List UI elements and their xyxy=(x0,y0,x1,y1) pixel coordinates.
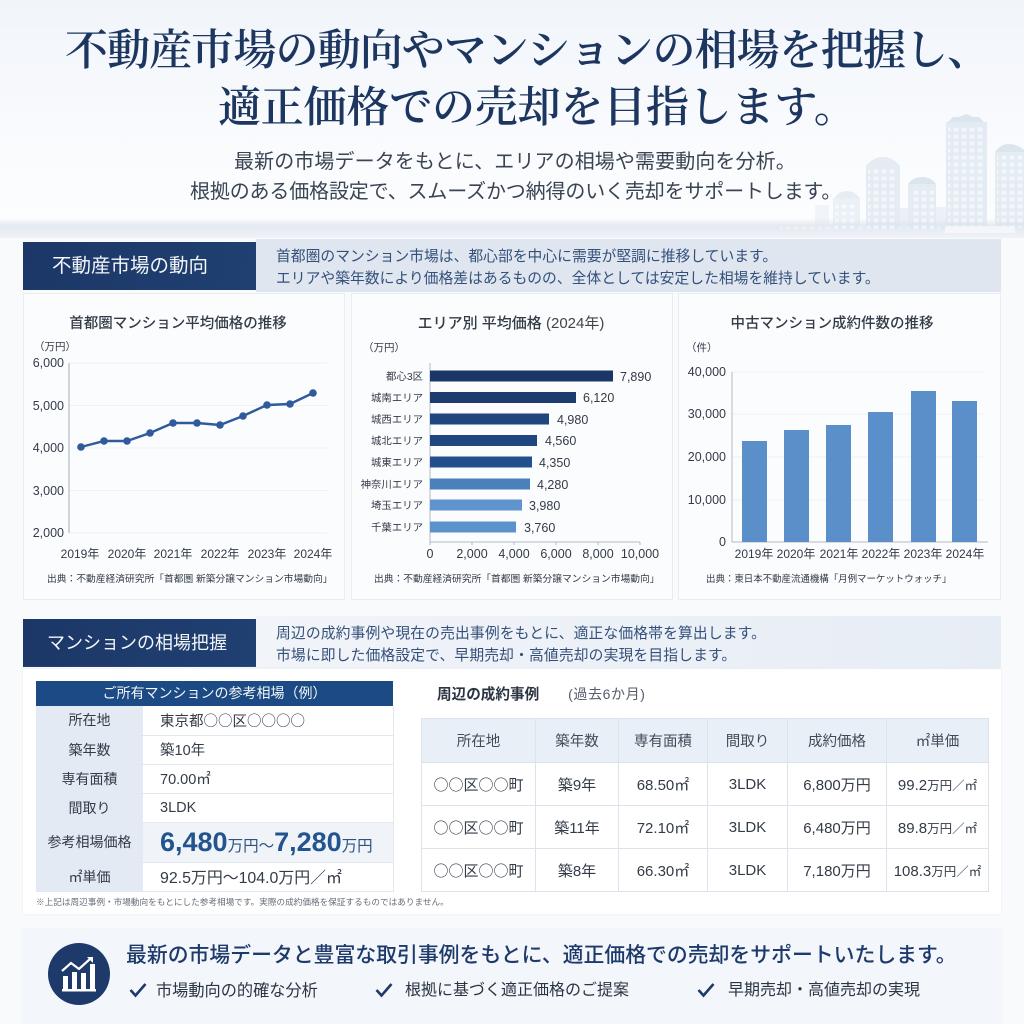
table: own property: 70.00㎡ xyxy=(160,772,211,788)
section 2 heading xyxy=(23,619,256,667)
x axis labels: 2022年 xyxy=(201,547,239,561)
chart title: 中古マンション成約件数の推移 xyxy=(730,315,934,332)
table: own property: 92.5万円～104.0万円／㎡ xyxy=(160,870,342,887)
chart title: エリア別 平均価格 (2024年) xyxy=(418,315,604,332)
heading bar: own property table xyxy=(36,681,393,706)
value labels: 4,560 xyxy=(545,434,576,448)
table: nearby transactions: 7,180万円 xyxy=(803,862,871,880)
icon: check 2 xyxy=(376,983,392,998)
x axis labels: 8,000 xyxy=(582,547,614,561)
y axis labels: 5,000 xyxy=(33,399,64,413)
x axis labels: 2020年 xyxy=(108,547,146,561)
x axis labels: 2023年 xyxy=(248,547,286,561)
illustration: city skyline xyxy=(815,114,1024,233)
bars xyxy=(430,370,613,532)
table: nearby transactions: 築9年 xyxy=(558,776,596,794)
table: own property: 専有面積 xyxy=(62,770,118,786)
y axis labels: 6,000 xyxy=(33,356,64,370)
table: nearby transactions: 所在地 xyxy=(457,734,500,750)
value labels: 4,350 xyxy=(539,456,570,470)
y axis labels: 0 xyxy=(719,535,726,549)
table: own property: 参考相場価格 xyxy=(48,834,132,850)
table: nearby transactions: ○○区○○町 xyxy=(433,860,524,880)
section 1 description xyxy=(276,248,880,287)
table: nearby transactions: 108.3万円／㎡ xyxy=(894,862,981,880)
value labels: 3,760 xyxy=(524,521,555,535)
source: 出典：不動産経済研究所「首都圏 新築分譲マンション市場動向」 xyxy=(47,572,332,585)
title: 適正価格での売却を目指します。 xyxy=(218,85,857,132)
table: nearby transactions: 68.50㎡ xyxy=(637,776,689,794)
table: nearby transactions: 専有面積 xyxy=(634,734,692,750)
area labels: 城西エリア xyxy=(371,414,423,426)
x axis labels xyxy=(735,547,984,561)
table: own property xyxy=(36,706,394,892)
icon: check 3 xyxy=(698,983,714,998)
icon: check 1 xyxy=(130,983,146,998)
x axis labels: 2022年 xyxy=(862,547,900,561)
title xyxy=(65,28,989,132)
panel: market price xyxy=(23,669,1001,914)
x axis labels: 2019年 xyxy=(735,547,773,561)
table: own property: 3LDK xyxy=(160,800,196,816)
x axis labels: 10,000 xyxy=(621,547,659,561)
y axis labels: 40,000 xyxy=(688,365,726,379)
x axis labels: 2020年 xyxy=(777,547,815,561)
unit label: （万円） xyxy=(363,342,405,354)
chart title: 首都圏マンション平均価格の推移 xyxy=(69,314,287,332)
benefit 2: 根拠に基づく適正価格のご提案 xyxy=(405,982,629,999)
area labels: 城南エリア xyxy=(371,392,423,404)
title: 不動産市場の動向やマンションの相場を把握し、 xyxy=(65,28,989,75)
table: nearby transactions: 間取り xyxy=(726,734,769,750)
table: nearby transactions xyxy=(421,718,989,892)
section 1 heading xyxy=(23,242,256,290)
y axis labels: 30,000 xyxy=(688,407,726,421)
table: nearby transactions: 築8年 xyxy=(558,862,596,880)
subtitle: 最新の市場データをもとに、エリアの相場や需要動向を分析。 xyxy=(234,151,796,173)
x axis labels: 2,000 xyxy=(456,547,488,561)
value labels: 7,890 xyxy=(620,370,651,384)
note: ※上記は周辺事例・市場動向をもとにした参考相場です。実際の成約価格を保証するものではありません。 xyxy=(36,897,449,907)
area labels: 千葉エリア xyxy=(371,521,423,534)
area labels: 城北エリア xyxy=(371,436,423,448)
table: own property: 築年数 xyxy=(68,742,110,758)
y axis labels: 3,000 xyxy=(33,484,64,498)
x axis labels: 6,000 xyxy=(540,547,572,561)
section 2 heading: マンションの相場把握 xyxy=(47,633,227,653)
section 2 description: 市場に即した価格設定で、早期売却・高値売却の実現を目指します。 xyxy=(276,648,736,664)
table: own property: 間取り xyxy=(68,800,110,816)
unit label: （件） xyxy=(686,342,718,354)
y axis labels xyxy=(33,356,64,540)
section 1 heading: 不動産市場の動向 xyxy=(52,255,208,277)
y axis labels: 20,000 xyxy=(688,450,726,464)
panel: area price bar chart xyxy=(351,293,673,600)
table: nearby transactions: 99.2万円／㎡ xyxy=(898,776,977,794)
table: nearby transactions: 築年数 xyxy=(555,734,599,750)
price line xyxy=(77,389,317,451)
benefit 1: 市場動向の的確な分析 xyxy=(156,982,318,1000)
x axis labels xyxy=(61,547,332,561)
table: own property: 築10年 xyxy=(160,743,205,759)
section 2 lead band xyxy=(256,616,1001,669)
section 1 lead band xyxy=(256,239,1001,292)
value labels: 4,980 xyxy=(557,413,588,427)
heading: nearby transactions: 周辺の成約事例 (過去6か月) xyxy=(437,686,645,703)
area labels xyxy=(361,371,423,534)
unit label: （万円） xyxy=(34,341,76,353)
panel: resale transactions bar chart xyxy=(678,293,1001,600)
benefit 3: 早期売却・高値売却の実現 xyxy=(728,982,920,999)
section 1 description: エリアや築年数により価格差はあるものの、全体としては安定した相場を維持しています。 xyxy=(276,271,880,287)
table: own property: ㎡単価 xyxy=(68,868,110,884)
x axis labels: 2023年 xyxy=(904,547,942,561)
area labels: 城東エリア xyxy=(371,456,423,469)
x axis labels: 2024年 xyxy=(946,547,984,561)
x axis labels: 4,000 xyxy=(498,547,530,561)
x axis labels: 2021年 xyxy=(820,547,858,561)
table: nearby transactions: 3LDK xyxy=(729,818,766,836)
x axis labels: 2024年 xyxy=(294,547,332,561)
subtitle xyxy=(190,150,841,203)
table: nearby transactions: ㎡単価 xyxy=(916,734,959,750)
table: nearby transactions: 72.10㎡ xyxy=(637,820,689,836)
value labels: 6,120 xyxy=(583,391,614,405)
icon: rising chart xyxy=(48,943,110,1005)
x axis labels: 0 xyxy=(427,547,434,561)
table: own property: 所在地 xyxy=(68,712,110,728)
section 1 description: 首都圏のマンション市場は、都心部を中心に需要が堅調に推移しています。 xyxy=(276,249,777,265)
table: nearby transactions: ○○区○○町 xyxy=(433,774,524,794)
y axis labels: 10,000 xyxy=(688,493,726,507)
bars xyxy=(742,391,977,542)
value labels xyxy=(524,370,651,535)
subtitle: 根拠のある価格設定で、スムーズかつ納得のいく売却をサポートします。 xyxy=(190,181,841,203)
area labels: 都心3区 xyxy=(386,371,423,383)
table: nearby transactions: 築11年 xyxy=(554,820,600,836)
y axis labels: 4,000 xyxy=(33,441,64,455)
y axis labels xyxy=(688,365,726,549)
x axis labels: 2019年 xyxy=(61,547,99,561)
table: nearby transactions: 66.30㎡ xyxy=(637,862,689,880)
table: own property: 東京都○○区○○○○ xyxy=(160,710,305,731)
area labels: 埼玉エリア xyxy=(371,499,423,512)
value labels: 4,280 xyxy=(537,478,568,492)
x axis labels xyxy=(427,547,659,561)
banner message: 最新の市場データと豊富な取引事例をもとに、適正価格での売却をサポートいたします。 xyxy=(126,944,957,967)
source: 出典：東日本不動産流通機構「月例マーケットウォッチ」 xyxy=(706,573,951,585)
section 2 description: 周辺の成約事例や現在の売出事例をもとに、適正な価格帯を算出します。 xyxy=(276,626,766,642)
table: nearby transactions: 3LDK xyxy=(729,862,766,878)
header background xyxy=(0,0,1024,238)
heading bar: own property table: ご所有マンションの参考相場（例） xyxy=(102,685,326,701)
x axis labels: 2021年 xyxy=(154,547,192,561)
table: nearby transactions: 6,800万円 xyxy=(803,776,871,794)
panel: average price line chart xyxy=(23,293,345,600)
table: nearby transactions: 成約価格 xyxy=(808,734,866,750)
table: nearby transactions: ○○区○○町 xyxy=(433,816,524,838)
section 2 description xyxy=(276,625,766,664)
area labels: 神奈川エリア xyxy=(361,478,423,491)
value labels: 3,980 xyxy=(529,499,560,513)
y axis labels: 2,000 xyxy=(33,526,64,540)
panel: bottom banner xyxy=(23,930,1001,1022)
table: nearby transactions: 3LDK xyxy=(729,776,766,792)
table: nearby transactions: 6,480万円 xyxy=(803,820,871,836)
table: own property: 6,480万円～7,280万円 xyxy=(160,826,373,856)
source: 出典：不動産経済研究所「首都圏 新築分譲マンション市場動向」 xyxy=(374,572,659,585)
table: nearby transactions: 89.8万円／㎡ xyxy=(898,820,977,836)
